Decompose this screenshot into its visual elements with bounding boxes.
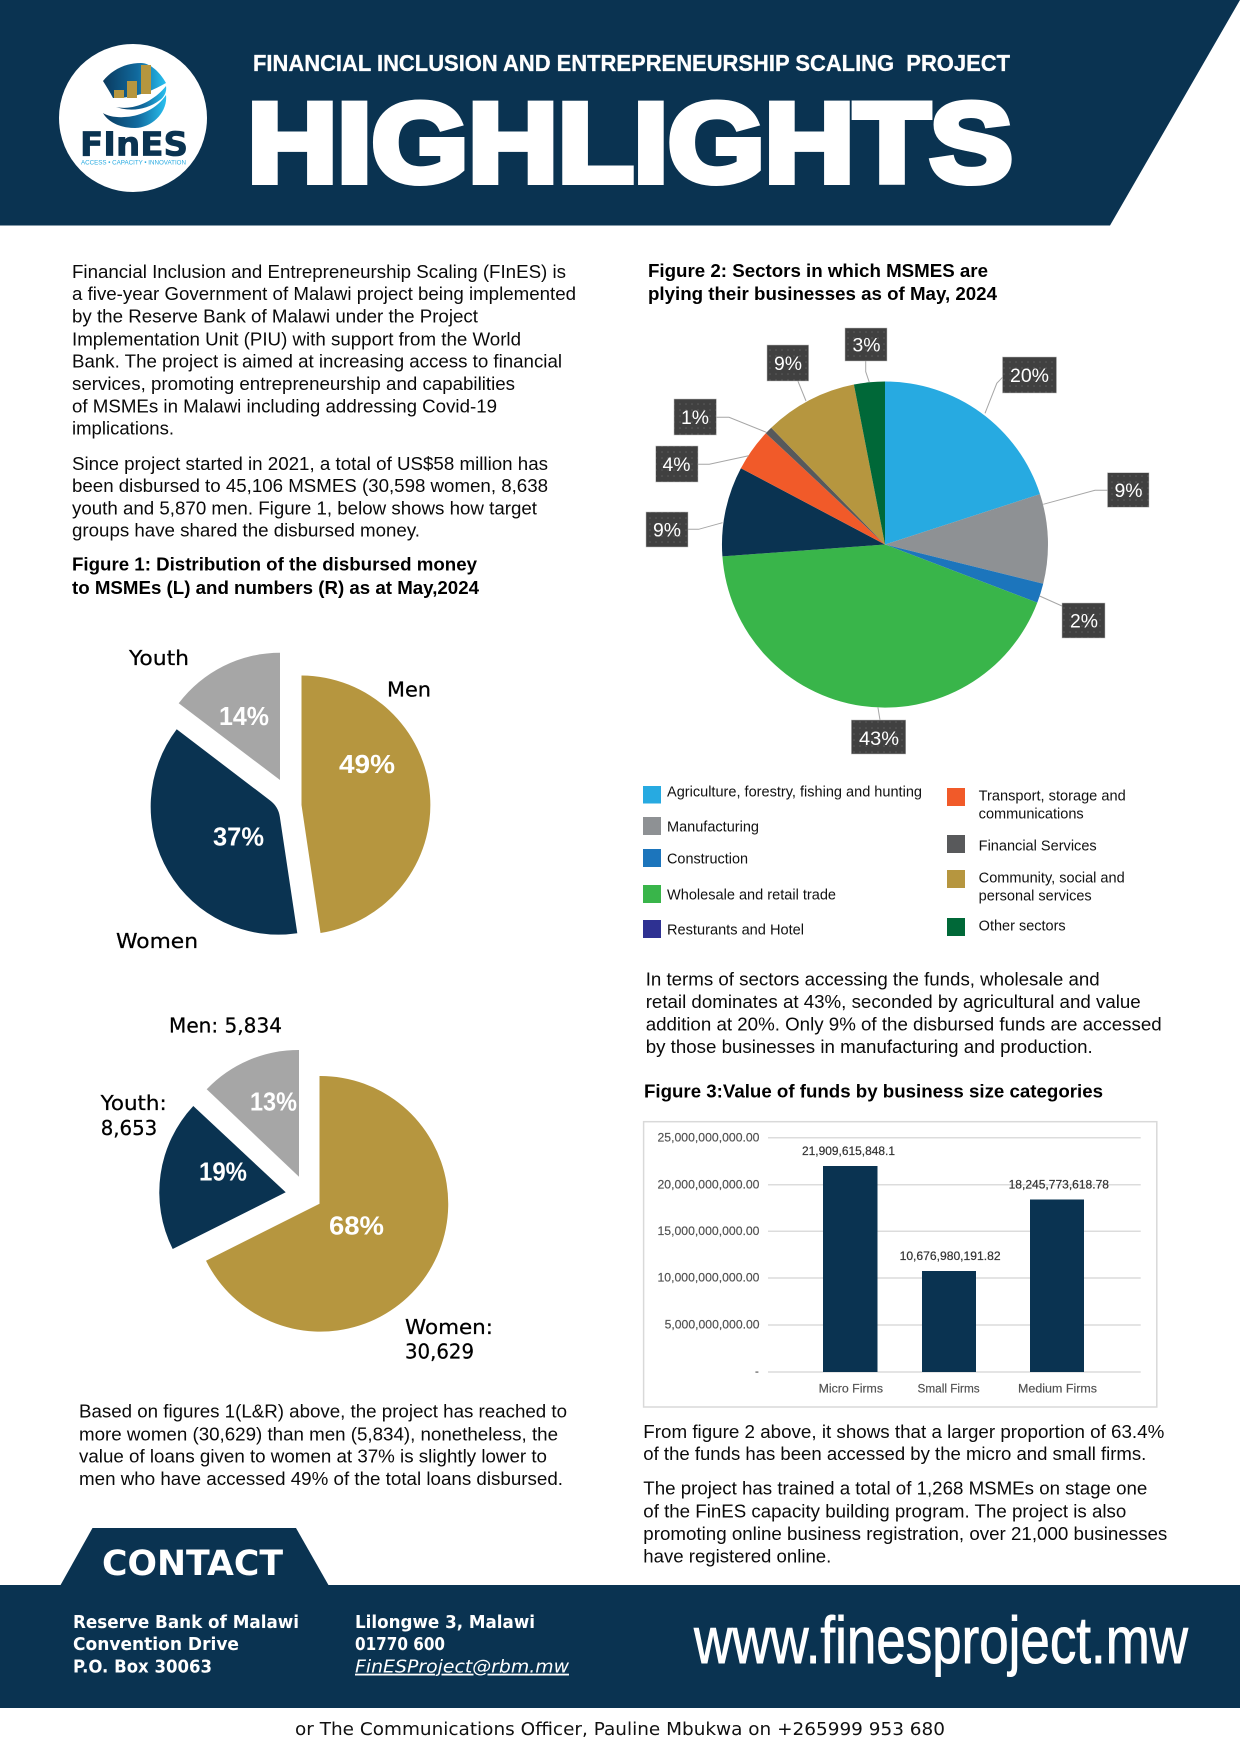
- text block: funds by firm size: [643, 1421, 1164, 1464]
- heading: figure 3: Figure 3:Value of funds by business size categories: [644, 1081, 1103, 1102]
- contact details: Lilongwe 3, Malawi: [355, 1612, 535, 1633]
- heading: figure 1: to MSMEs (L) and numbers (R) as at May,2024: [72, 578, 479, 599]
- text block: disbursement summary: youth and 5,870 men. Figure 1, below shows how target: [72, 498, 538, 519]
- label: 1%: [674, 399, 716, 435]
- legend: sectors: Wholesale and retail trade: [667, 888, 836, 904]
- bar chart: value of funds by firm size: [644, 1122, 1157, 1407]
- bar: small firms: [922, 1271, 976, 1372]
- pie chart: sectors: [646, 328, 1149, 754]
- logo: FInES: [59, 44, 207, 192]
- legend: sectors: Construction: [667, 852, 748, 868]
- text block: figures 1 interpretation: men who have accessed 49% of the total loans disbursed.: [79, 1468, 563, 1489]
- text block: training and registration: The project has trained a total of 1,268 MSMEs on stage one: [643, 1478, 1147, 1499]
- contact details: 01770 600: [355, 1634, 445, 1655]
- text block: training and registration: promoting online business registration, over 21,000 businesses: [643, 1523, 1167, 1544]
- label: 1%: 1%: [681, 408, 709, 429]
- header banner: [0, 0, 1240, 226]
- text block: funds by firm size: of the funds has been accessed by the micro and small firms.: [643, 1443, 1146, 1464]
- data labels: [802, 1146, 1109, 1263]
- heading: figure 2: Figure 2: Sectors in which MSMES are: [648, 261, 988, 282]
- pie chart: numbers of MSMEs: Women:: [405, 1315, 493, 1339]
- pie chart: numbers of MSMEs: 30,629: [405, 1340, 474, 1364]
- label: 9% manufacturing: [1108, 473, 1149, 507]
- pie chart: numbers of MSMEs: 13%: [250, 1089, 297, 1117]
- legend: sectors: personal services: [979, 889, 1092, 905]
- label: 3%: [845, 328, 887, 361]
- text block: training and registration: have registered online.: [643, 1545, 831, 1566]
- pie chart: numbers of MSMEs: 19%: [199, 1159, 247, 1187]
- text block: project introduction: services, promoting entrepreneurship and capabilities: [72, 373, 515, 394]
- label: 43%: [851, 720, 906, 754]
- pie chart: numbers of MSMEs: [100, 1014, 493, 1364]
- text block: disbursement summary: Since project started in 2021, a total of US$58 million has: [72, 453, 548, 474]
- text block: project introduction: by the Reserve Bank of Malawi under the Project: [72, 306, 479, 327]
- label: 9% community: [767, 345, 809, 381]
- pie chart: numbers of MSMEs: Youth:: [100, 1091, 167, 1115]
- text block: sector interpretation: In terms of sectors accessing the funds, wholesale and: [646, 969, 1100, 990]
- pie chart: distribution of money: [116, 646, 431, 953]
- logo: FInES: ACCESS • CAPACITY • INNOVATION: [81, 160, 186, 166]
- heading: figure 1: Figure 1: Distribution of the disbursed money: [72, 555, 477, 576]
- axis labels: Medium Firms: [1018, 1384, 1097, 1396]
- legend: sectors: Agriculture, forestry, fishing and hunting: [667, 785, 922, 801]
- address: [73, 1612, 299, 1678]
- text block: disbursement summary: been disbursed to 45,106 MSMES (30,598 women, 8,638: [72, 475, 548, 496]
- pie chart: distribution of money: Men: [387, 678, 431, 702]
- pie chart: numbers of MSMEs: Men: 5,834: [169, 1014, 282, 1038]
- axis labels: 15,000,000,000.00: [658, 1226, 760, 1238]
- footer band: [0, 1585, 1240, 1708]
- text block: project introduction: Bank. The project is aimed at increasing access to financial: [72, 351, 562, 372]
- legend: sectors: Financial Services: [979, 839, 1097, 855]
- bar: medium firms: [1030, 1200, 1084, 1372]
- text block: project introduction: of MSMEs in Malawi including addressing Covid-19: [72, 396, 497, 417]
- text block: training and registration: of the FinES capacity building program. The project is also: [643, 1500, 1126, 1521]
- axis labels: Small Firms: [918, 1384, 980, 1396]
- logo: FInES: FInES: [80, 124, 188, 164]
- contact tab: CONTACT: [102, 1544, 283, 1584]
- contact details: [355, 1612, 569, 1678]
- legend: sectors: Community, social and: [979, 871, 1125, 887]
- label: 4%: [656, 446, 698, 482]
- axis labels: 10,000,000,000.00: [658, 1273, 760, 1285]
- address: Convention Drive: [73, 1634, 239, 1655]
- legend: sectors: communications: [979, 807, 1084, 823]
- axis labels: 25,000,000,000.00: [658, 1132, 760, 1144]
- text block: sector interpretation: retail dominates at 43%, seconded by agricultural and value: [646, 991, 1141, 1012]
- text block: project introduction: a five-year Government of Malawi project being implemented: [72, 283, 576, 304]
- data labels: 21,909,615,848.1: [802, 1146, 895, 1158]
- address: P.O. Box 30063: [73, 1657, 212, 1678]
- label: 9% community: 9%: [774, 354, 802, 375]
- label: 4%: 4%: [662, 455, 691, 476]
- contact details: FinESProject@rbm.mw: [355, 1657, 569, 1678]
- label: 2%: 2%: [1070, 612, 1098, 632]
- text block: figures 1 interpretation: more women (30,629) than men (5,834), nonetheless, the: [79, 1423, 558, 1444]
- text block: disbursement summary: groups have shared the disbursed money.: [72, 520, 420, 541]
- text block: training and registration: [643, 1478, 1167, 1566]
- text block: sector interpretation: by those businesses in manufacturing and production.: [646, 1036, 1093, 1057]
- text block: disbursement summary: [72, 453, 548, 541]
- axis labels: 5,000,000,000.00: [665, 1320, 760, 1332]
- pie chart: distribution of money: 49%: [339, 751, 395, 779]
- heading: figure 1: [72, 555, 479, 599]
- axis labels: -: [755, 1366, 759, 1378]
- legend: sectors: Transport, storage and: [979, 789, 1126, 805]
- axis labels: [658, 1132, 1097, 1396]
- legend: sectors: Resturants and Hotel: [667, 923, 804, 939]
- label: 20%: 20%: [1010, 366, 1049, 387]
- label: 3%: 3%: [852, 336, 881, 356]
- communications officer line: or The Communications Officer, Pauline Mbukwa on +265999 953 680: [295, 1719, 945, 1740]
- text block: project introduction: [72, 261, 576, 439]
- axis labels: Micro Firms: [819, 1384, 883, 1396]
- text block: figures 1 interpretation: Based on figures 1(L&R) above, the project has reached to: [79, 1401, 567, 1422]
- text block: project introduction: Financial Inclusion and Entrepreneurship Scaling (FInES) is: [72, 261, 566, 282]
- text block: project introduction: implications.: [72, 418, 174, 439]
- text block: sector interpretation: addition at 20%. Only 9% of the disbursed funds are accessed: [646, 1014, 1162, 1035]
- label: 43%: 43%: [859, 729, 899, 750]
- legend: sectors: Other sectors: [979, 919, 1066, 935]
- legend: sectors: [643, 785, 1126, 939]
- address: Reserve Bank of Malawi: [73, 1612, 299, 1633]
- data labels: 10,676,980,191.82: [900, 1251, 1001, 1263]
- contact tab: [60, 1528, 329, 1586]
- title: HIGHLIGHTS: HIGHLIGHTS: [248, 80, 1013, 206]
- label: 9% navy: 9%: [653, 520, 681, 542]
- pie chart: distribution of money: 14%: [219, 703, 269, 731]
- pie chart: distribution of money: Women: [116, 929, 198, 953]
- pie chart: numbers of MSMEs: 68%: [329, 1213, 384, 1241]
- bar: micro firms: [823, 1166, 878, 1372]
- text block: sector interpretation: [646, 969, 1162, 1057]
- label: 2%: [1062, 603, 1105, 638]
- pie chart: distribution of money: Youth: [128, 646, 189, 670]
- label: 9% navy: [646, 512, 688, 547]
- text block: figures 1 interpretation: [79, 1401, 567, 1489]
- subtitle: FINANCIAL INCLUSION AND ENTREPRENEURSHIP SCALING PROJECT: [253, 50, 1011, 76]
- label: 20%: [1002, 357, 1056, 393]
- leader lines: [688, 361, 1108, 720]
- data labels: 18,245,773,618.78: [1009, 1180, 1109, 1192]
- pie chart: distribution of money: 37%: [213, 824, 264, 852]
- label: 9% manufacturing: 9%: [1114, 481, 1143, 502]
- heading: figure 2: [648, 261, 997, 305]
- text block: figures 1 interpretation: value of loans given to women at 37% is slightly lower to: [79, 1446, 547, 1467]
- legend: sectors: Manufacturing: [667, 820, 759, 836]
- axis labels: 20,000,000,000.00: [658, 1180, 760, 1192]
- text block: project introduction: Implementation Unit (PIU) with support from the World: [72, 328, 521, 349]
- text block: funds by firm size: From figure 2 above, it shows that a larger proportion of 63.4%: [643, 1421, 1164, 1442]
- heading: figure 2: plying their businesses as of May, 2024: [648, 284, 997, 305]
- pie chart: numbers of MSMEs: 8,653: [101, 1116, 157, 1140]
